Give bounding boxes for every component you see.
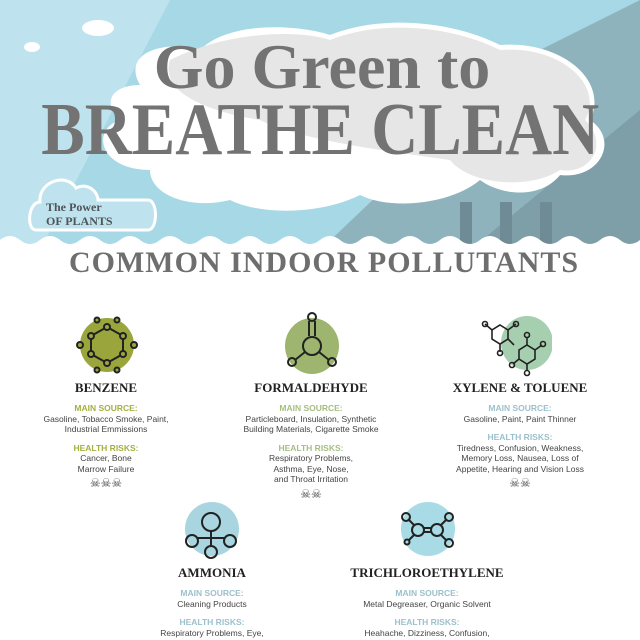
icon: xylene (482, 316, 552, 376)
section heading: COMMON INDOOR POLLUTANTS (69, 246, 579, 279)
panel: ammonia: AMMONIA (178, 565, 246, 580)
icon: ammonia (185, 502, 239, 559)
panel: formaldehyde: and Throat Irritation (274, 474, 348, 484)
badge: power of plants (28, 178, 157, 232)
panel: xylene & toluene: Appetite, Hearing and Vision Loss (456, 464, 584, 474)
panel: formaldehyde: Particleboard, Insulation, Synthetic (246, 414, 376, 424)
panel: benzene: MAIN SOURCE: (74, 403, 138, 413)
panel: formaldehyde (243, 312, 379, 500)
icon: formaldehyde (285, 312, 339, 374)
panel: formaldehyde: Building Materials, Cigarette Smoke (243, 424, 379, 434)
badge: power of plants: OF PLANTS (46, 214, 113, 228)
panel: benzene: Gasoline, Tobacco Smoke, Paint, (43, 414, 169, 424)
panel: xylene & toluene: Tiredness, Confusion, Weakness, (457, 442, 583, 452)
panel: ammonia: Respiratory Problems, Eye, (160, 628, 264, 638)
panel: trichloroethylene: Metal Degreaser, Organic Solvent (363, 598, 491, 608)
badge: power of plants: The Power (46, 200, 102, 214)
panel: formaldehyde: HEALTH RISKS: (278, 442, 344, 452)
panel: trichloroethylene: Heahache, Dizziness, Confusion, (364, 628, 490, 638)
panel: ammonia (160, 502, 264, 638)
panel: trichloroethylene (350, 502, 504, 638)
panel: trichloroethylene: HEALTH RISKS: (394, 617, 460, 627)
panel: ammonia: Cleaning Products (177, 598, 247, 608)
panel: benzene: ☠☠☠ (90, 476, 122, 490)
panel: ammonia: HEALTH RISKS: (179, 617, 244, 627)
icon: benzene (76, 316, 138, 374)
big cloud (103, 23, 604, 211)
panel: benzene: Cancer, Bone (80, 453, 132, 463)
panel: formaldehyde: MAIN SOURCE: (279, 403, 343, 413)
panel: benzene: BENZENE (75, 380, 137, 395)
panel: xylene & toluene: XYLENE & TOLUENE (453, 380, 587, 395)
panel: formaldehyde: FORMALDEHYDE (254, 380, 368, 395)
title: Go Green to (154, 31, 490, 102)
panel: trichloroethylene: TRICHLOROETHYLENE (350, 565, 504, 580)
panel: xylene & toluene: Gasoline, Paint, Paint Thinner (464, 414, 576, 424)
panel: formaldehyde: Asthma, Eye, Nose, (273, 464, 349, 474)
title (41, 31, 599, 171)
panel: benzene: Industrial Emmissions (65, 424, 147, 434)
panel: xylene & toluene: HEALTH RISKS: (487, 432, 552, 442)
panel: xylene & toluene (453, 316, 587, 490)
panel: benzene: HEALTH RISKS: (73, 442, 138, 452)
panel: formaldehyde: ☠☠ (300, 486, 322, 500)
panel: xylene & toluene: ☠☠ (509, 476, 531, 490)
panel: benzene (43, 316, 169, 490)
panel: xylene & toluene: Memory Loss, Nausea, Loss of (461, 453, 579, 463)
panel: formaldehyde: Respiratory Problems, (269, 453, 353, 463)
panel: trichloroethylene: MAIN SOURCE: (395, 588, 459, 598)
panel: xylene & toluene: MAIN SOURCE: (488, 403, 552, 413)
panel: benzene: Marrow Failure (78, 464, 134, 474)
panel: ammonia: MAIN SOURCE: (180, 588, 244, 598)
icon: trichloroethylene (401, 502, 455, 556)
title: BREATHE CLEAN (41, 89, 599, 171)
header illustration (0, 0, 640, 244)
